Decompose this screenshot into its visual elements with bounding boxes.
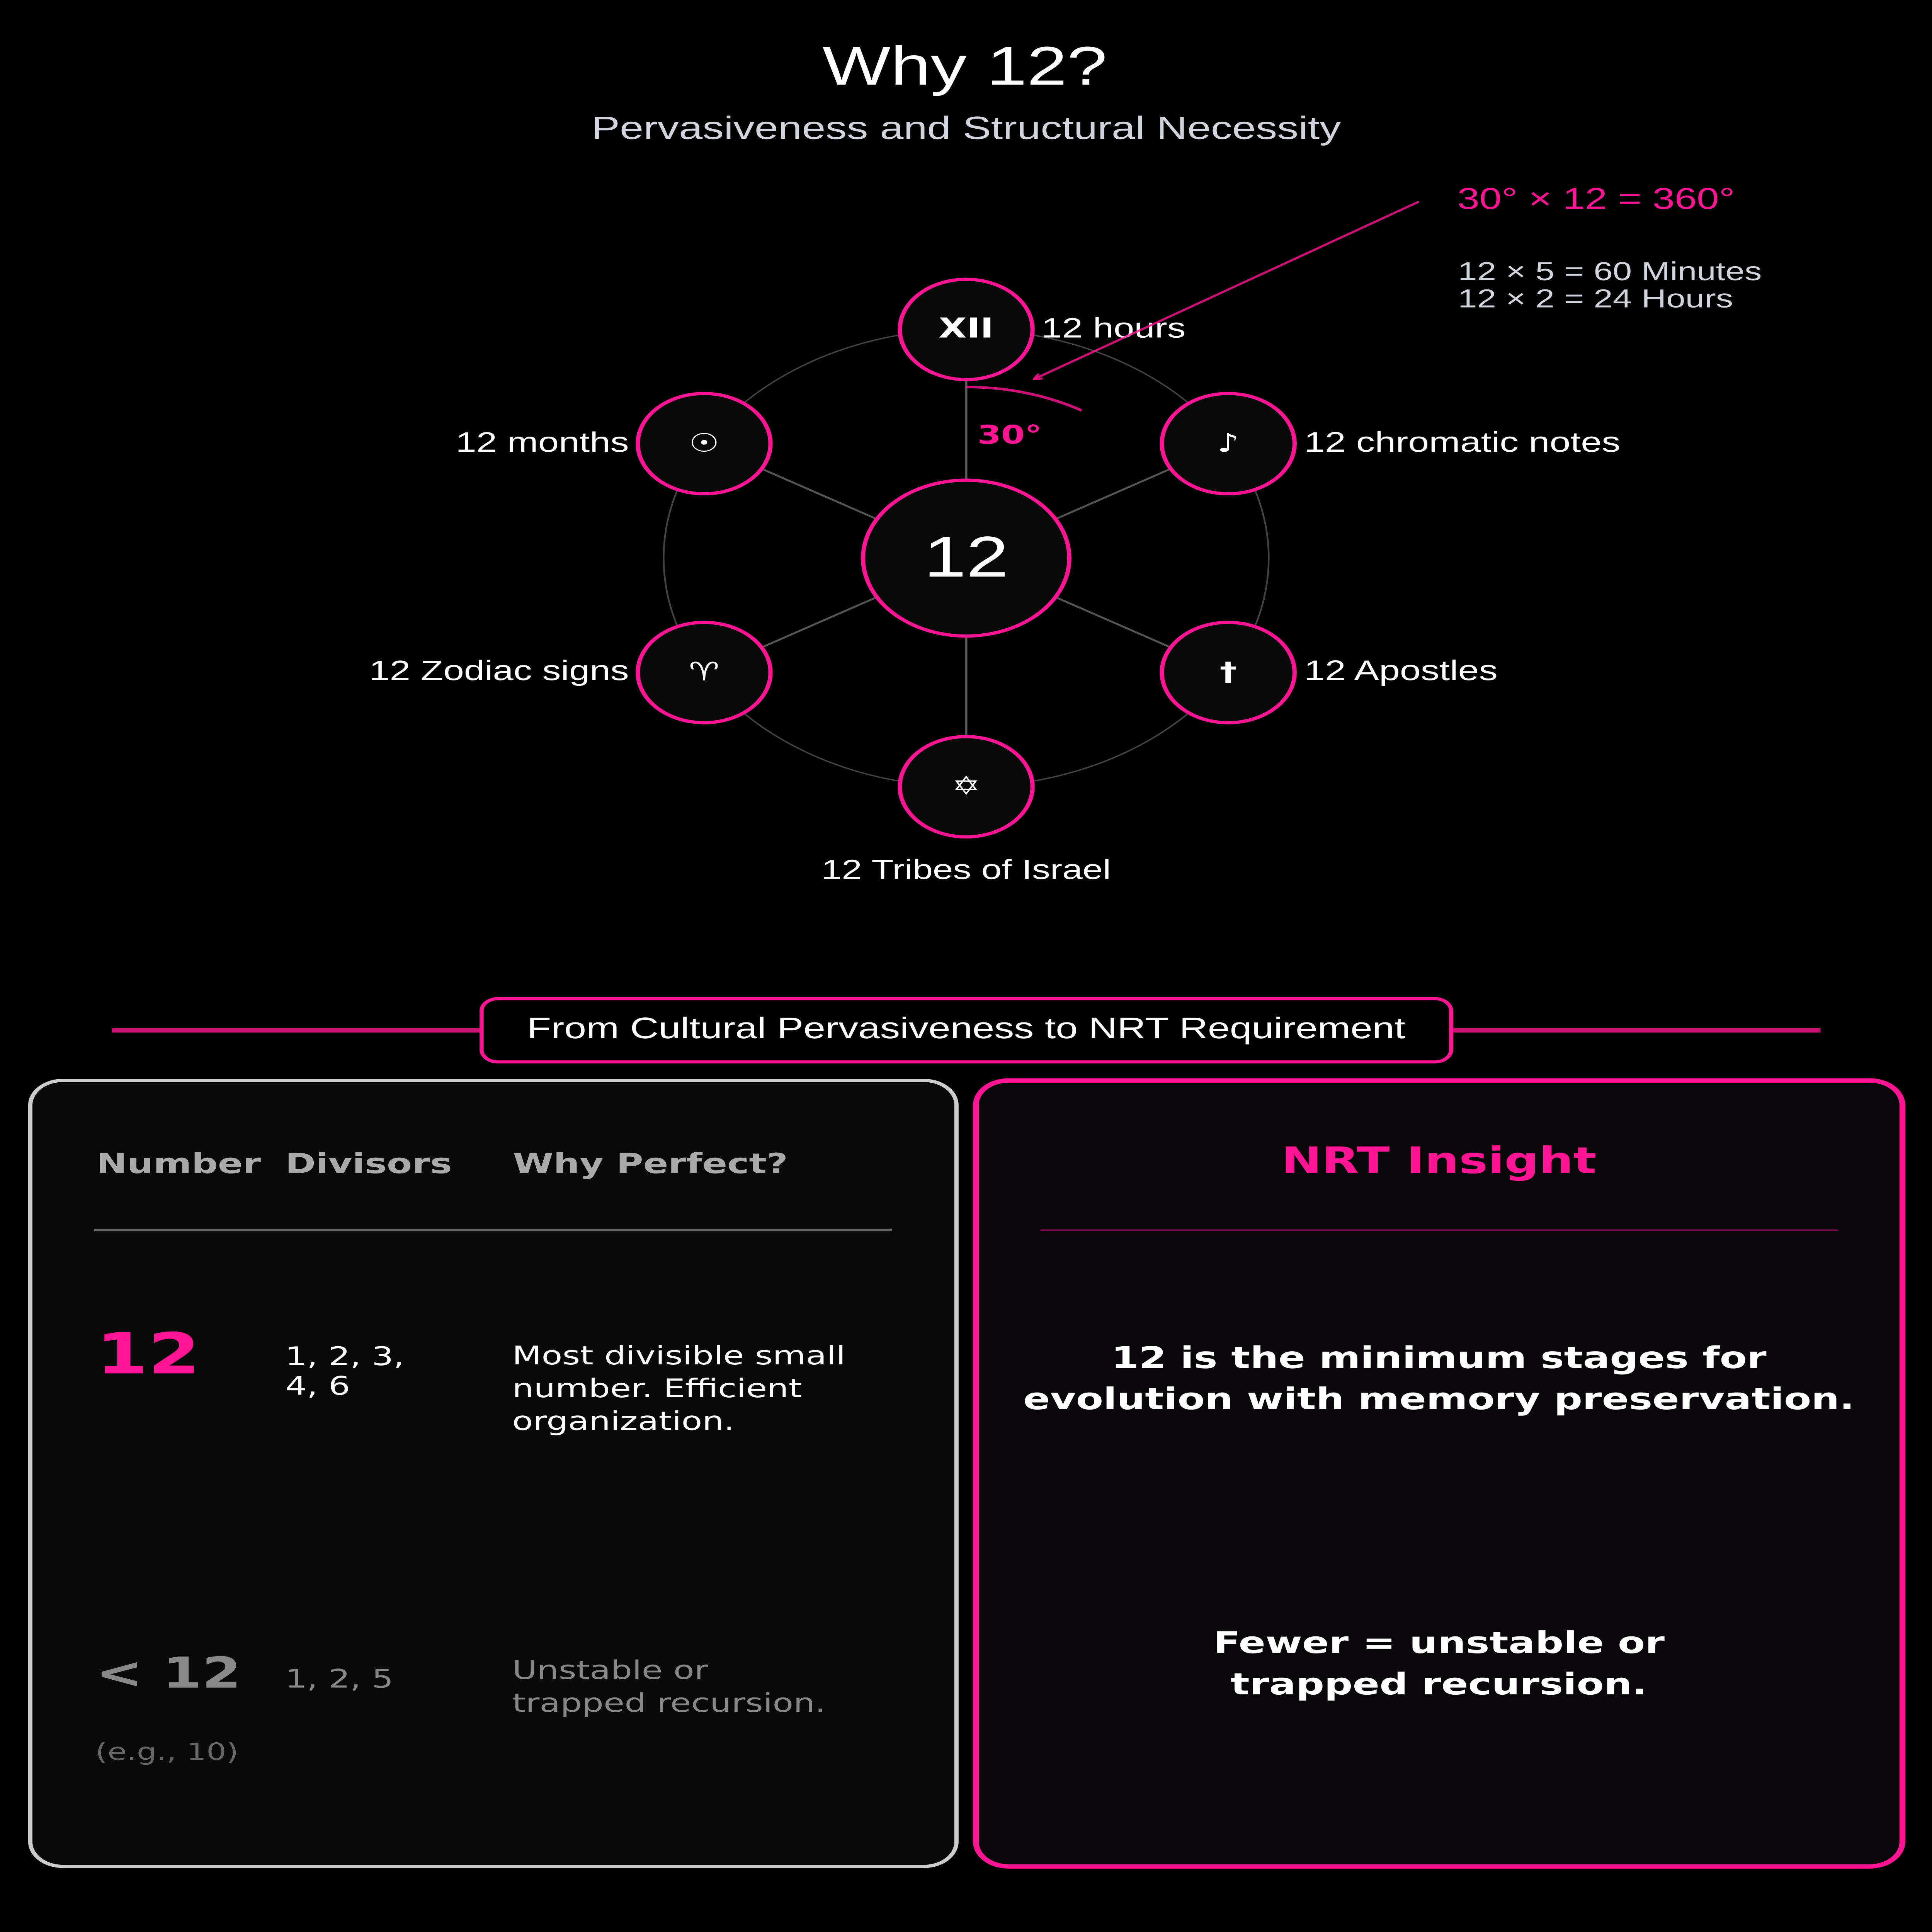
outer ring xyxy=(663,330,1269,787)
node: 12 Zodiac signs: ♈︎ xyxy=(689,656,719,687)
node: 12 months xyxy=(456,393,770,494)
section heading box xyxy=(481,999,1451,1062)
row: 12: 1, 2, 3, xyxy=(285,1341,404,1371)
section connector: right xyxy=(1451,1028,1820,1032)
table header: Divisors xyxy=(285,1148,452,1180)
row: 12: number. Efficient xyxy=(512,1373,802,1403)
arrow: annotation to angle xyxy=(1034,202,1418,379)
node: 12 chromatic notes: ♪ xyxy=(1218,428,1239,458)
node: 12 hours xyxy=(900,279,1186,379)
panel: NRT insight xyxy=(976,1080,1902,1866)
title: Why 12? xyxy=(822,35,1107,96)
table header xyxy=(96,1148,788,1180)
insight: fewer stages xyxy=(1213,1626,1665,1702)
panel heading: NRT Insight xyxy=(1281,1139,1597,1182)
angle label: 30° xyxy=(978,420,1042,450)
annotation: time formulas xyxy=(1458,257,1762,313)
row: less than 12: < 12 xyxy=(95,1648,241,1698)
node: 12 Zodiac signs: 12 Zodiac signs xyxy=(369,655,629,686)
row: 12: organization. xyxy=(512,1406,735,1436)
node: 12 chromatic notes: 12 chromatic notes xyxy=(1304,426,1621,458)
spokes xyxy=(704,330,1228,787)
insight: minimum stages: evolution with memory preservation. xyxy=(1023,1382,1854,1416)
table header: Number xyxy=(96,1148,261,1180)
annotation: time formulas: 12 × 2 = 24 Hours xyxy=(1458,284,1733,313)
annotation: time formulas: 12 × 5 = 60 Minutes xyxy=(1458,257,1762,286)
section connector: left xyxy=(112,1028,481,1032)
row: less than 12: trapped recursion. xyxy=(512,1688,826,1718)
table header: Why Perfect? xyxy=(513,1148,788,1180)
node: 12 months: ☉ xyxy=(689,428,719,458)
node: 12 Tribes of Israel xyxy=(821,736,1111,885)
centre node: 12: 12 xyxy=(924,525,1009,589)
angle arc xyxy=(966,387,1082,410)
row: 12: 4, 6 xyxy=(285,1371,350,1401)
subtitle: Pervasiveness and Structural Necessity xyxy=(592,110,1341,146)
insight: fewer stages: trapped recursion. xyxy=(1231,1667,1647,1702)
node: 12 Apostles: † xyxy=(1220,656,1237,687)
row: less than 12: (e.g., 10) xyxy=(95,1738,238,1765)
node: 12 Tribes of Israel: 12 Tribes of Israel xyxy=(821,854,1111,885)
node: 12 months: 12 months xyxy=(456,427,629,458)
annotation: angle formula: 30° × 12 = 360° xyxy=(1457,182,1735,215)
node: 12 Zodiac signs xyxy=(369,622,770,723)
centre node: 12 xyxy=(863,480,1069,636)
row: less than 12 xyxy=(95,1648,826,1765)
row: less than 12: 1, 2, 5 xyxy=(285,1664,393,1694)
insight: minimum stages xyxy=(1023,1340,1854,1416)
node: 12 Apostles: 12 Apostles xyxy=(1304,655,1498,686)
panel: number comparison table xyxy=(30,1080,956,1866)
insight: minimum stages: 12 is the minimum stages for xyxy=(1111,1340,1767,1375)
section heading box: From Cultural Pervasiveness to NRT Requirement xyxy=(527,1011,1405,1045)
row: less than 12: Unstable or xyxy=(512,1655,709,1685)
node: 12 hours: XII xyxy=(939,312,994,344)
row: 12: Most divisible small xyxy=(512,1340,845,1371)
node: 12 Apostles xyxy=(1162,622,1498,723)
node: 12 hours: 12 hours xyxy=(1041,312,1186,344)
insight: fewer stages: Fewer = unstable or xyxy=(1213,1626,1665,1660)
row: 12 xyxy=(96,1321,845,1436)
diagram: twelve hub and spokes xyxy=(369,202,1621,885)
row: 12: 12 xyxy=(96,1321,200,1387)
node: 12 chromatic notes xyxy=(1162,393,1621,494)
node: 12 Tribes of Israel: ✡ xyxy=(952,771,980,801)
